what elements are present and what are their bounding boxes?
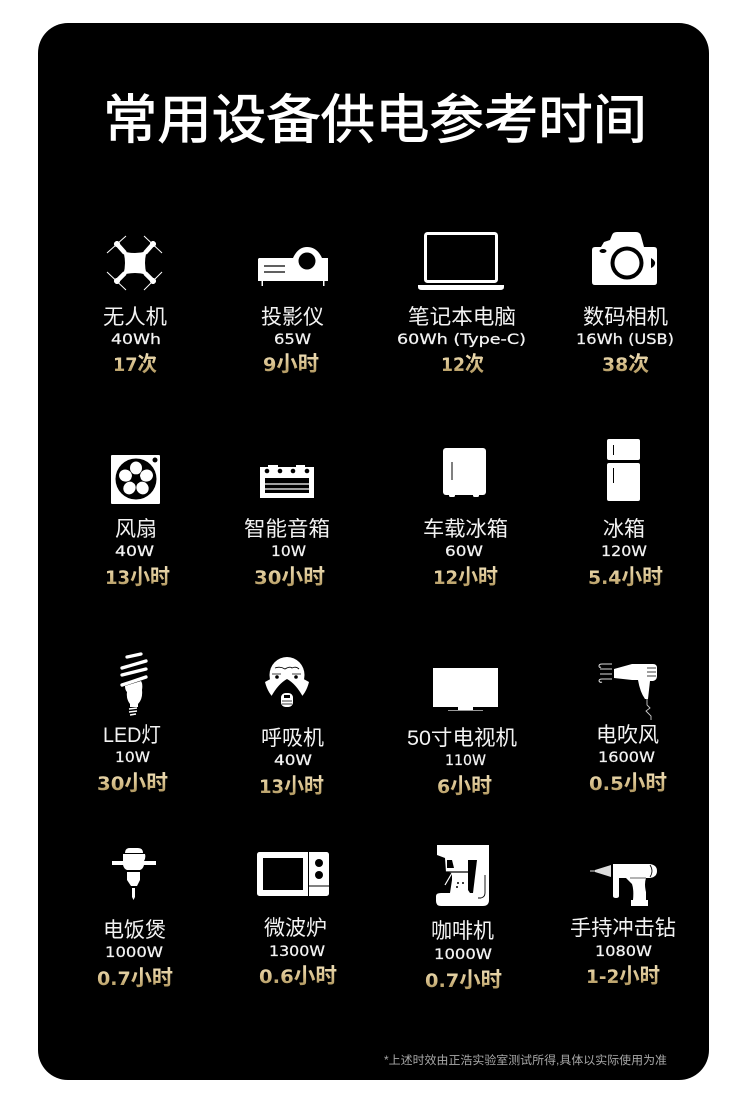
runtime: camera: 38次 (602, 353, 649, 376)
power: hair dryer: 1600W (598, 750, 655, 766)
label: TV: 50寸电视机 (407, 727, 517, 750)
power: LED bulb: 10W (115, 750, 150, 766)
icon: coffee machine (436, 845, 489, 906)
icon: rice cooker tool (112, 848, 156, 900)
power: TV: 110W (445, 753, 486, 769)
label: smart speaker: 智能音箱 (244, 518, 330, 541)
runtime: hand drill: 1-2小时 (586, 965, 660, 988)
runtime: hair dryer: 0.5小时 (589, 772, 667, 795)
item: car fridge (423, 448, 508, 589)
power: microwave: 1300W (269, 944, 325, 960)
label: coffee machine: 咖啡机 (431, 920, 494, 943)
runtime: coffee machine: 0.7小时 (425, 969, 502, 992)
label: hair dryer: 电吹风 (596, 724, 659, 747)
runtime: laptop: 12次 (441, 353, 484, 376)
icon: smart speaker (260, 465, 314, 498)
label: microwave: 微波炉 (264, 917, 327, 940)
runtime: projector: 9小时 (263, 353, 319, 376)
item: smart speaker (244, 465, 330, 589)
icon: hand drill (590, 864, 657, 906)
icon: respirator (265, 657, 309, 707)
runtime: smart speaker: 30小时 (254, 566, 325, 589)
power: fridge: 120W (601, 544, 647, 560)
power: camera: 16Wh (USB) (576, 332, 674, 348)
power: rice cooker: 1000W (105, 945, 163, 961)
icon: hair dryer (599, 664, 657, 720)
power: car fridge: 60W (445, 544, 483, 560)
label: car fridge: 车载冰箱 (423, 518, 508, 541)
title: 常用设备供电参考时间 (103, 91, 647, 150)
item: laptop (397, 234, 526, 376)
item: fridge (588, 439, 663, 589)
power: coffee machine: 1000W (434, 947, 492, 963)
item: fan (105, 455, 170, 589)
power: drone: 40Wh (111, 332, 161, 348)
label: respirator: 呼吸机 (261, 727, 324, 750)
item: hand drill (570, 864, 676, 988)
runtime: car fridge: 12小时 (433, 566, 498, 589)
item: drone (103, 236, 167, 376)
power: hand drill: 1080W (595, 944, 652, 960)
item: rice cooker (97, 848, 173, 990)
runtime: respirator: 13小时 (259, 775, 324, 798)
icon: camera (592, 232, 657, 285)
item: LED bulb (97, 654, 168, 795)
footnote: *上述时效由正浩实验室测试所得,具体以实际使用为准 (384, 1053, 667, 1067)
power: projector: 65W (274, 332, 311, 348)
item: camera (576, 232, 674, 376)
power: respirator: 40W (274, 753, 312, 769)
icon: TV (433, 668, 498, 711)
power: smart speaker: 10W (271, 544, 306, 560)
icon: fan (111, 455, 160, 504)
label: drone: 无人机 (103, 306, 167, 329)
runtime: drone: 17次 (113, 353, 157, 376)
runtime: TV: 6小时 (437, 775, 492, 798)
icon: car fridge (443, 448, 486, 497)
label: rice cooker: 电饭煲 (103, 919, 166, 942)
runtime: LED bulb: 30小时 (97, 772, 168, 795)
icon: microwave (257, 852, 329, 896)
icon: drone (107, 236, 162, 290)
item: coffee machine (425, 845, 502, 992)
runtime: microwave: 0.6小时 (259, 965, 337, 988)
runtime: fridge: 5.4小时 (588, 566, 663, 589)
icon: projector (258, 247, 328, 286)
label: fan: 风扇 (115, 518, 157, 541)
item: respirator (259, 657, 324, 798)
runtime: fan: 13小时 (105, 566, 170, 589)
power: laptop: 60Wh (Type-C) (397, 332, 526, 348)
label: LED bulb: LED灯 (103, 724, 161, 747)
icon: LED bulb (122, 654, 146, 715)
label: fridge: 冰箱 (603, 518, 645, 541)
runtime: rice cooker: 0.7小时 (97, 967, 173, 990)
icon: fridge (607, 439, 640, 501)
item: TV (407, 668, 517, 798)
item: projector (258, 247, 328, 376)
label: projector: 投影仪 (261, 306, 324, 329)
power: fan: 40W (115, 544, 154, 560)
label: hand drill: 手持冲击钻 (570, 917, 676, 940)
item: hair dryer (589, 664, 667, 795)
item: microwave (257, 852, 337, 988)
label: laptop: 笔记本电脑 (408, 306, 516, 329)
label: camera: 数码相机 (583, 306, 668, 329)
icon: laptop (418, 234, 504, 290)
